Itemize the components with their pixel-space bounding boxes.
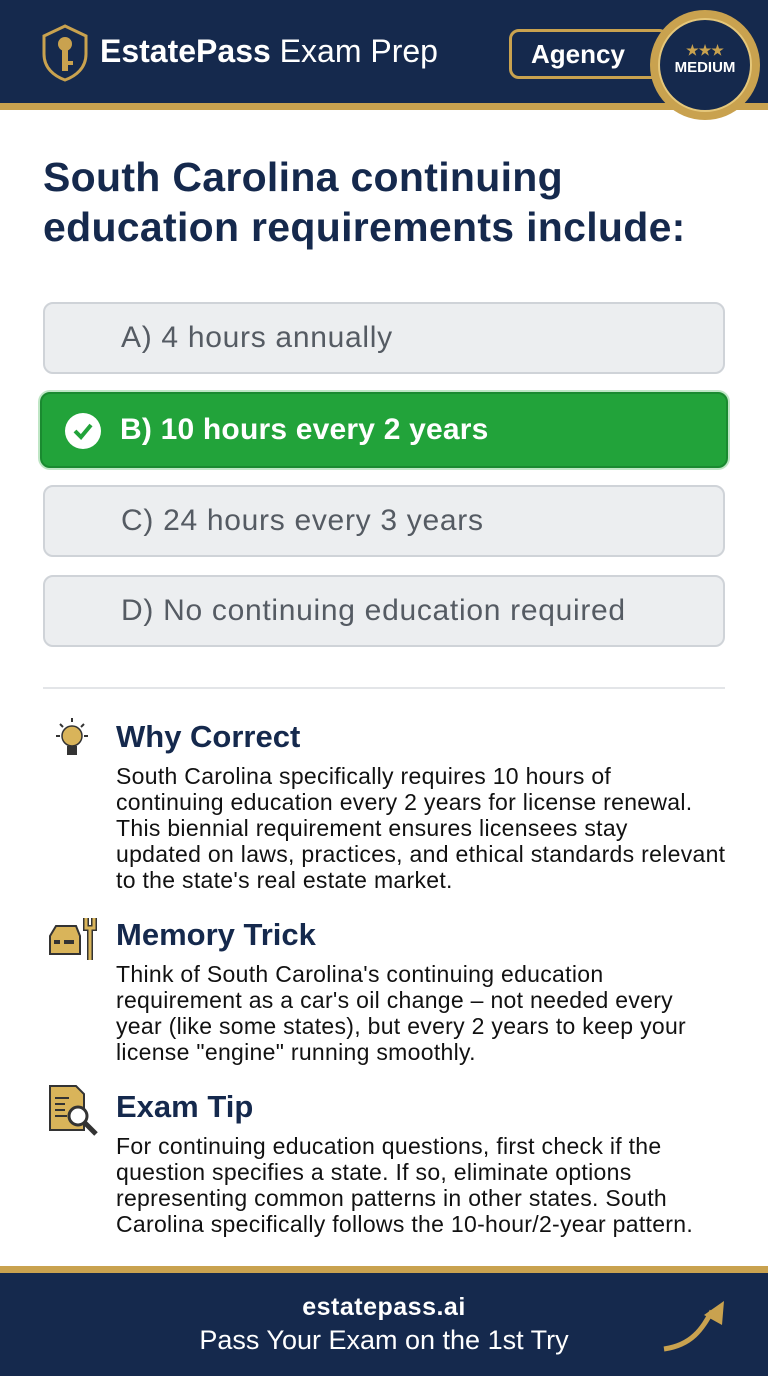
badge: medium seal: MEDIUM (675, 59, 735, 76)
option B correct: B) 10 hours every 2 years (120, 413, 489, 446)
title: South Carolina continuing (43, 154, 563, 200)
option A: A) 4 hours annually (121, 321, 393, 354)
header (0, 0, 768, 110)
option D: D) No continuing education required (121, 594, 626, 627)
text: South Carolina specifically requires 10 hours of (116, 763, 611, 789)
icon: arrow (664, 1301, 724, 1352)
option D (43, 575, 725, 647)
text: updated on laws, practices, and ethical standards relevant (116, 841, 725, 867)
icon: check (65, 413, 101, 449)
text: to the state's real estate market. (116, 867, 453, 893)
tagline: Pass Your Exam on the 1st Try (199, 1325, 569, 1355)
text: year (like some states), but every 2 years to keep your (116, 1013, 686, 1039)
icon: bulb (56, 718, 88, 755)
option B correct (40, 392, 728, 468)
option C: C) 24 hours every 3 years (121, 504, 484, 537)
section: exam tip (49, 1085, 693, 1237)
text: Carolina specifically follows the 10-hour/2-year pattern. (116, 1211, 693, 1237)
badge: medium seal: ★★★ (686, 42, 724, 58)
footer url: estatepass.ai (302, 1293, 466, 1321)
text (116, 1133, 693, 1237)
icon: document magnifier (49, 1085, 98, 1136)
option A (43, 302, 725, 374)
text (116, 961, 686, 1065)
title (43, 154, 686, 250)
option C (43, 485, 725, 557)
icon: car wrench (49, 918, 97, 960)
text (116, 763, 725, 893)
text: requirement as a car's oil change – not needed every (116, 987, 673, 1013)
heading: Memory Trick (116, 917, 316, 952)
text: continuing education every 2 years for license renewal. (116, 789, 692, 815)
heading: Why Correct (116, 719, 300, 754)
text: representing common patterns in other states. South (116, 1185, 667, 1211)
footer (0, 1266, 768, 1376)
heading: Exam Tip (116, 1089, 253, 1124)
badge: Agency: Agency (531, 39, 625, 69)
badge: Agency (509, 29, 669, 79)
icon: shield key logo (42, 24, 88, 82)
section: memory trick (49, 917, 686, 1065)
text: question specifies a state. If so, eliminate options (116, 1159, 632, 1185)
text: For continuing education questions, first check if the (116, 1133, 662, 1159)
text: license "engine" running smoothly. (116, 1039, 476, 1065)
badge: medium seal (650, 10, 760, 120)
text: This biennial requirement ensures licensees stay (116, 815, 628, 841)
title: education requirements include: (43, 204, 686, 250)
logo text: EstatePass Exam Prep (100, 33, 438, 69)
text: Think of South Carolina's continuing education (116, 961, 603, 987)
section: why correct (56, 718, 725, 893)
